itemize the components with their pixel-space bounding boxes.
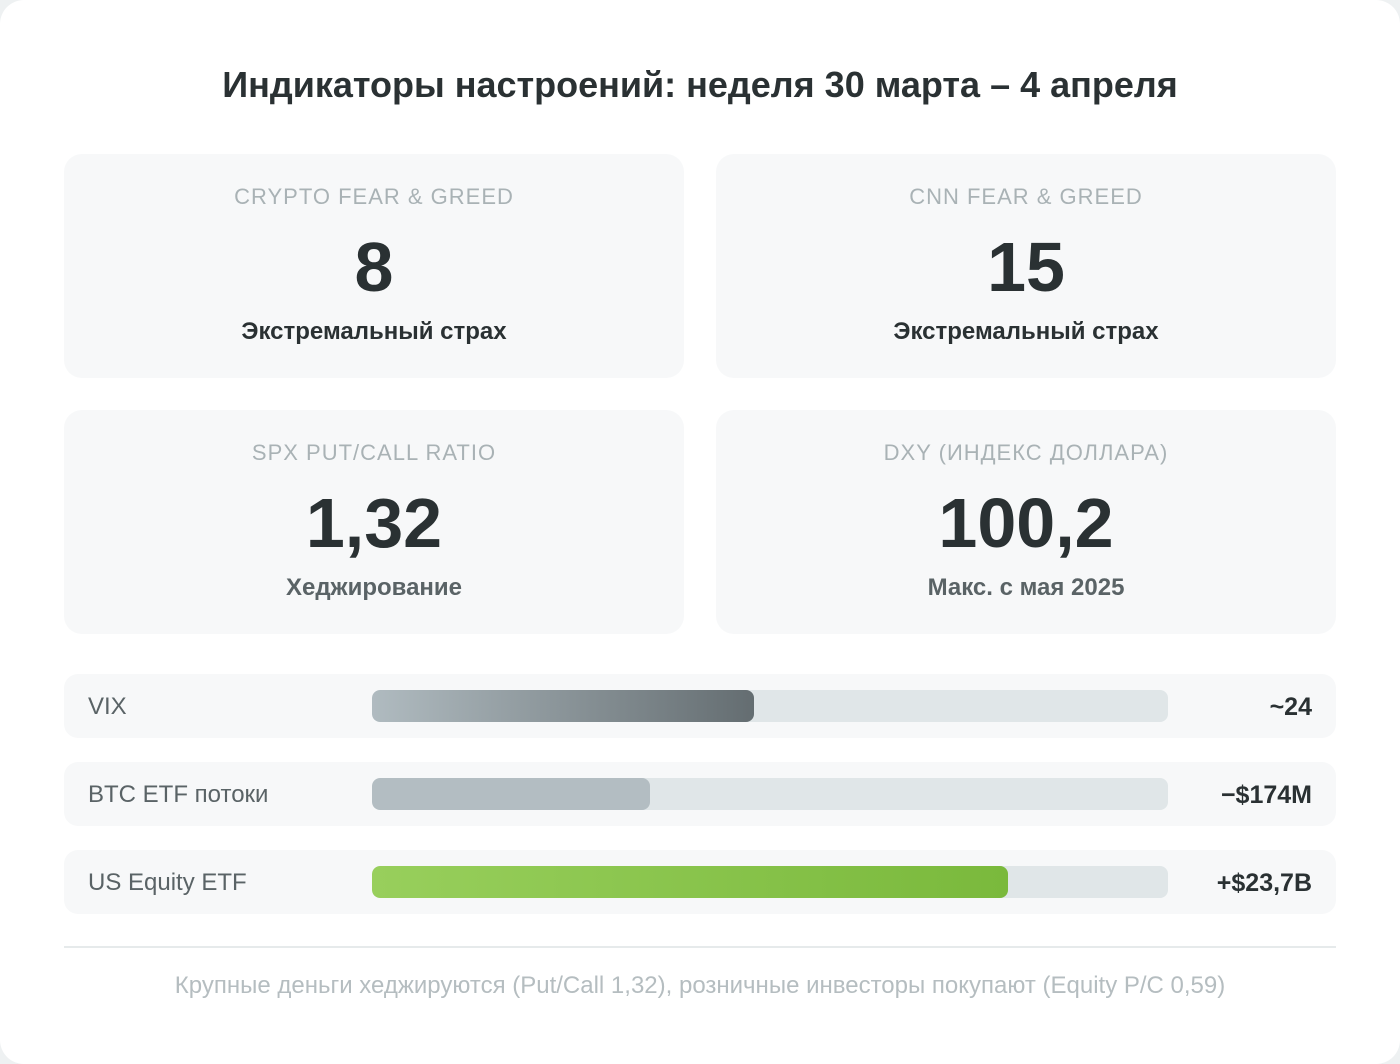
bar row: VIX: VIX — [88, 693, 127, 720]
panel: crypto fear & greed: CRYPTO FEAR & GREED — [234, 184, 514, 209]
panel: spx put/call: 1,32 — [306, 484, 442, 562]
panel: dxy: Макс. с мая 2025 — [928, 574, 1124, 601]
panel: cnn fear & greed: CNN FEAR & GREED — [909, 184, 1143, 209]
bar row: US Equity ETF: US Equity ETF — [88, 869, 247, 896]
bar row: US Equity ETF — [64, 850, 1336, 914]
panel: cnn fear & greed: Экстремальный страх — [893, 318, 1159, 345]
panel: dxy: 100,2 — [938, 484, 1114, 562]
panel: cnn fear & greed: 15 — [987, 228, 1065, 306]
panel: spx put/call: Хеджирование — [286, 574, 462, 601]
panel: dxy — [716, 410, 1336, 634]
panel: crypto fear & greed: Экстремальный страх — [241, 318, 507, 345]
footer note: Крупные деньги хеджируются (Put/Call 1,32), розничные инвесторы покупают (Equity P/C 0,59) — [175, 972, 1225, 999]
panel: cnn fear & greed — [716, 154, 1336, 378]
panel: spx put/call — [64, 410, 684, 634]
bar row: VIX — [64, 674, 1336, 738]
panel: spx put/call: SPX PUT/CALL RATIO — [252, 440, 496, 465]
bar row: BTC ETF: −$174M — [1221, 781, 1312, 809]
bar row: BTC ETF: BTC ETF потоки — [88, 781, 268, 808]
title: Индикаторы настроений: неделя 30 марта – 4 апреля — [222, 64, 1178, 105]
bar row: US Equity ETF: +$23,7B — [1217, 869, 1312, 897]
panel: crypto fear & greed: 8 — [355, 228, 393, 306]
panel: dxy: DXY (ИНДЕКС ДОЛЛАРА) — [884, 440, 1168, 465]
bar row: VIX: ~24 — [1270, 693, 1312, 721]
panel: crypto fear & greed — [64, 154, 684, 378]
bar row: BTC ETF — [64, 762, 1336, 826]
